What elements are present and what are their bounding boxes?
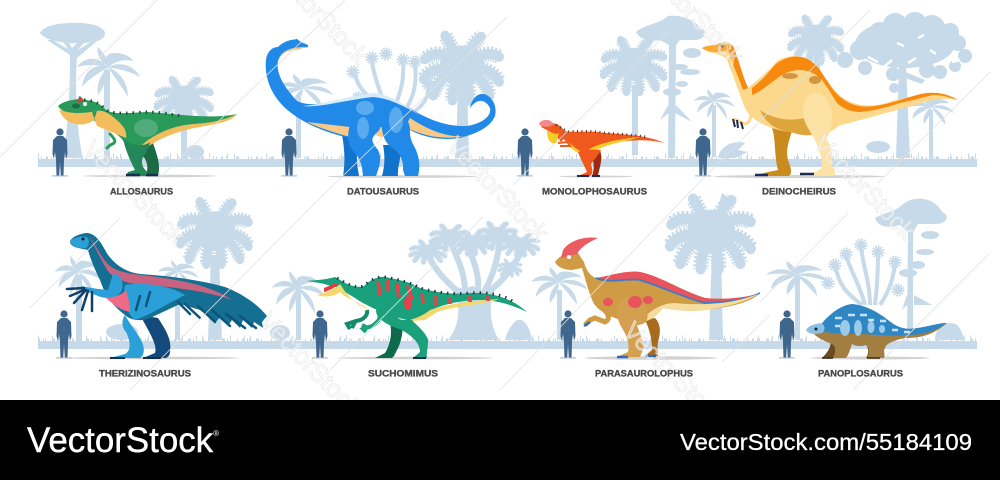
- watermark text: VectorStock: [254, 307, 367, 422]
- tree: fern palm: [790, 18, 841, 70]
- tree: dragon tree: [348, 49, 433, 120]
- tree: dragon tree: [823, 240, 903, 305]
- watermark text: VectorStock: [441, 132, 554, 247]
- dinosaur name labels: DEINOCHEIRUS: [762, 186, 836, 198]
- bushes: [106, 320, 965, 341]
- tree: palm: [272, 271, 325, 340]
- human scale figures: [52, 128, 795, 358]
- tree: palm: [55, 256, 102, 341]
- tree: baobab group: [410, 223, 538, 340]
- tree: umbrella acacia: [40, 23, 105, 158]
- tree: small palm: [158, 260, 199, 340]
- watermark text: VectorStock: [618, 317, 731, 432]
- dinosaur: panoplosaurus: [806, 304, 947, 358]
- dinosaur name labels: MONOLOPHOSAURUS: [542, 186, 647, 198]
- tree: small palm: [694, 89, 735, 157]
- tree: palm: [531, 267, 588, 340]
- ground shadows: [66, 175, 930, 360]
- dinosaur: parasaurolophus: [555, 238, 760, 357]
- ground band bottom: [38, 338, 977, 349]
- dinosaur: monolophosaurus: [539, 120, 664, 176]
- dinosaur: suchomimus: [307, 277, 527, 358]
- dinosaur: allosaurus: [58, 96, 237, 176]
- dinosaur: deinocheirus: [702, 42, 958, 176]
- top row scenery silhouettes: [40, 12, 972, 160]
- tree: feathery palm: [180, 202, 248, 340]
- footer logo text: ®: [213, 429, 219, 438]
- dinosaur name labels: SUCHOMIMUS: [368, 368, 438, 380]
- footer logo text: VectorStock: [27, 421, 214, 460]
- dinosaur name labels: PANOPLOSAURUS: [818, 368, 903, 380]
- tree: palm 1: [77, 47, 140, 160]
- footer bar: [0, 400, 1000, 480]
- bottom row scenery silhouettes: [55, 193, 965, 341]
- dinosaur name labels: ALLOSAURUS: [110, 186, 173, 198]
- tree: palm behind sauropod: [274, 74, 333, 158]
- dinosaur name labels: DATOUSAURUS: [347, 186, 419, 198]
- tree: wide palm: [766, 261, 829, 340]
- tree: palm 2: [157, 79, 210, 160]
- watermark text: VectorStock: [808, 130, 921, 245]
- watermark text: VectorStock: [78, 135, 191, 250]
- dinosaur: datousaurus: [266, 39, 496, 176]
- tree: small palm right: [909, 95, 954, 160]
- tree: conifer: [875, 199, 947, 335]
- dinosaur name labels: PARASAUROLOPHUS: [595, 368, 693, 380]
- footer url text: VectorStock.com/55184109: [680, 429, 972, 455]
- watermark text: [78, 0, 921, 432]
- tree: araucaria: [837, 12, 972, 158]
- dinosaur name labels: THERIZINOSAURUS: [99, 368, 191, 380]
- tree: fan palm: [424, 36, 499, 158]
- tree: feathery tall palm: [670, 193, 751, 340]
- dinosaur: therizinosaurus: [67, 233, 267, 358]
- tree: feathery palm: [604, 40, 663, 155]
- ground band top: [38, 156, 977, 167]
- bushes: [186, 141, 890, 159]
- dinosaur name labels: [99, 186, 903, 380]
- tree: tall conifer: [636, 16, 705, 158]
